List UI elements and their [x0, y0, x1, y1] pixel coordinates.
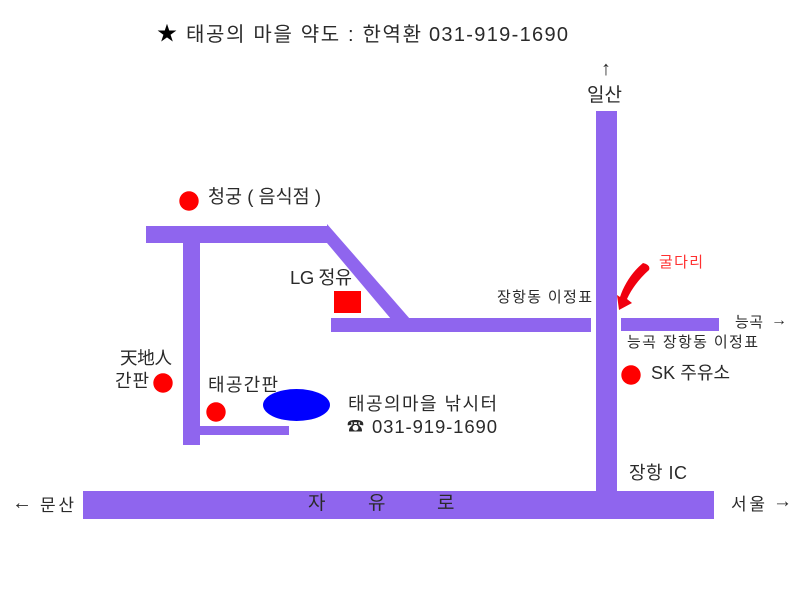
- marker: Cheonjiin sign: [153, 373, 173, 393]
- label: Janghang-dong sign: 장항동 이정표: [497, 289, 592, 306]
- road network: [83, 111, 719, 519]
- label: Munsan: 문산: [40, 496, 74, 515]
- label: Ilsan: 일산: [587, 84, 622, 106]
- label: north arrow: ↑: [601, 58, 611, 80]
- label: SK station: SK 주유소: [651, 363, 730, 383]
- label: fishing site phone: 031-919-1690: [372, 416, 497, 437]
- road: Janghang-dong road: [331, 318, 591, 332]
- marker: SK station: [621, 365, 641, 385]
- road: short branch: [200, 426, 289, 435]
- label: Seoul: 서울: [731, 495, 765, 514]
- title: 태공의 마을 약도 : 한역환: [186, 23, 421, 46]
- label: Jayu-ro: 유: [368, 493, 385, 514]
- marker: LG station: [334, 291, 361, 313]
- label: Neunggok arrow: 능곡: [735, 314, 763, 331]
- label: Munsan: ←: [12, 492, 32, 514]
- label: Janghang IC: 장항 IC: [629, 463, 687, 483]
- label: fishing site name: 태공의마을 낚시터: [348, 394, 497, 414]
- road: upper west road: [146, 226, 328, 243]
- label: Taegong sign: 태공간판: [208, 375, 278, 395]
- road: west vertical road: [183, 243, 200, 445]
- label: sign: 간판: [115, 371, 149, 391]
- road: Jayu-ro: [83, 491, 714, 519]
- label: Cheonjiin: 天地人: [120, 348, 172, 368]
- label: Jayu-ro: [308, 492, 454, 514]
- label: Cheonggung: 청궁 ( 음식점 ): [208, 186, 321, 207]
- label: Munsan: [12, 492, 74, 515]
- label: Seoul: →: [773, 491, 792, 512]
- label: Jayu-ro: 자: [308, 492, 325, 514]
- title: ★: [157, 23, 177, 45]
- label: LG station: LG 정유: [290, 267, 352, 288]
- marker: Cheonggung: [179, 191, 199, 211]
- fishing pond: [263, 389, 330, 421]
- road: diagonal: [327, 224, 410, 319]
- label: Neunggok sign: 능곡 장항동 이정표: [627, 334, 758, 351]
- label: fishing site phone: ☎: [347, 417, 364, 436]
- marker: Taegong sign: [206, 402, 226, 422]
- label: Seoul: [731, 491, 792, 514]
- arrow: bridge pointer: [617, 263, 649, 310]
- label: Neunggok arrow: →: [771, 312, 787, 329]
- road: north-south main road: [596, 111, 617, 492]
- label: Jayu-ro: 로: [437, 493, 454, 514]
- label: oyster bridge: 굴다리: [659, 254, 703, 271]
- title: [157, 23, 568, 46]
- title: 031-919-1690: [429, 24, 568, 46]
- road: Neunggok road: [621, 318, 719, 331]
- label: Neunggok arrow: [735, 312, 787, 331]
